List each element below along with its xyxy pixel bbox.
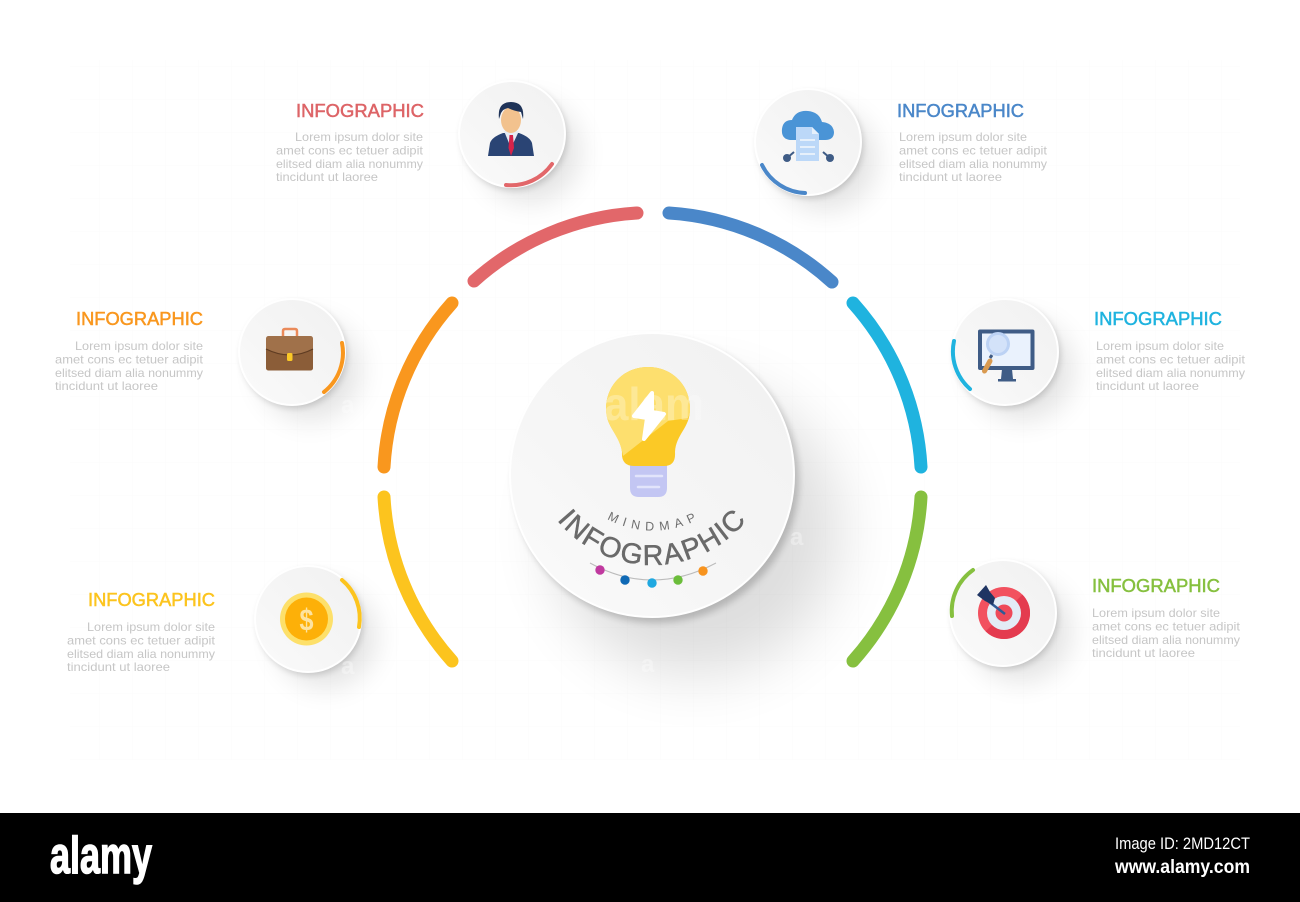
text: green label: INFOGRAPHIC xyxy=(1092,576,1220,596)
text: green label xyxy=(1092,576,1241,660)
text: yellow label: amet cons ec tetuer adipit xyxy=(67,634,216,648)
text: cyan label: INFOGRAPHIC xyxy=(1094,309,1222,329)
label: infographic curved text: INFOGRAPHIC xyxy=(558,508,744,566)
text: green label: amet cons ec tetuer adipit xyxy=(1092,620,1241,634)
text: red label xyxy=(276,101,424,184)
text: orange label: elitsed diam alia nonummy xyxy=(55,366,203,380)
text: cyan label: amet cons ec tetuer adipit xyxy=(1096,352,1246,366)
node: green target xyxy=(950,560,1071,681)
text: yellow label: Lorem ipsum dolor site xyxy=(87,620,215,634)
icon: light bulb: alam xyxy=(604,378,704,430)
text: red label: tincidunt ut laoree xyxy=(276,170,378,184)
text: red label: amet cons ec tetuer adipit xyxy=(276,144,424,158)
progress arc: red xyxy=(506,164,552,185)
icon: light bulb xyxy=(604,367,704,497)
watermark marks: a xyxy=(341,653,355,680)
arc: red xyxy=(474,213,637,281)
icon: businessman xyxy=(488,102,534,156)
ring: six coloured arc segments xyxy=(384,213,921,661)
node: cyan monitor xyxy=(952,299,1073,420)
progress arc: blue xyxy=(762,165,805,193)
text: red label: Lorem ipsum dolor site xyxy=(295,130,423,144)
text: blue label: Lorem ipsum dolor site xyxy=(899,130,1027,144)
node: red person xyxy=(459,81,580,202)
text: blue label: INFOGRAPHIC xyxy=(897,101,1024,121)
progress arc: green xyxy=(952,570,973,616)
node: yellow coin xyxy=(255,566,376,687)
footer: stock photo banner xyxy=(0,813,1300,902)
text: blue label: amet cons ec tetuer adipit xyxy=(899,144,1048,158)
text: cyan label: elitsed diam alia nonummy xyxy=(1096,366,1245,380)
watermark marks: a xyxy=(790,524,804,551)
text: red label: elitsed diam alia nonummy xyxy=(276,157,423,171)
text: orange label: tincidunt ut laoree xyxy=(55,379,158,393)
text: orange label: amet cons ec tetuer adipit xyxy=(55,352,204,366)
text: yellow label xyxy=(67,590,216,674)
text: cyan label: Lorem ipsum dolor site xyxy=(1096,339,1224,353)
text: blue label: tincidunt ut laoree xyxy=(899,170,1002,184)
text: cyan label xyxy=(1094,309,1246,393)
arc: green xyxy=(853,497,921,661)
text: blue label: elitsed diam alia nonummy xyxy=(899,157,1047,171)
text: green label: elitsed diam alia nonummy xyxy=(1092,633,1240,647)
text: yellow label: elitsed diam alia nonummy xyxy=(67,647,215,661)
watermark marks: a xyxy=(341,392,355,419)
text: orange label: Lorem ipsum dolor site xyxy=(75,339,203,353)
icon: monitor with magnifier xyxy=(978,330,1034,382)
icon: dollar coin: $ xyxy=(300,602,314,637)
decoration: coloured dot string xyxy=(590,563,716,588)
arc: orange xyxy=(384,303,452,467)
arc: blue xyxy=(669,213,832,282)
arc: yellow xyxy=(384,497,452,661)
text: yellow label: INFOGRAPHIC xyxy=(88,590,215,610)
arc: cyan xyxy=(853,303,921,467)
text: yellow label: tincidunt ut laoree xyxy=(67,660,170,674)
node: blue cloud xyxy=(755,89,876,210)
progress arc: orange xyxy=(324,343,343,392)
node: orange briefcase xyxy=(239,299,360,420)
footer url: www.alamy.com xyxy=(1114,857,1250,878)
progress arc: cyan xyxy=(953,341,970,389)
footer logo: alamy xyxy=(50,827,152,885)
label: mindmap curved text: MINDMAP xyxy=(608,512,694,530)
central hub xyxy=(511,334,856,691)
icon: target with dart xyxy=(977,585,1030,639)
text: green label: Lorem ipsum dolor site xyxy=(1092,606,1220,620)
footer image id: Image ID: 2MD12CT xyxy=(1115,834,1250,853)
text: blue label xyxy=(897,101,1048,184)
icon: cloud document xyxy=(782,111,834,162)
icon: briefcase xyxy=(266,329,313,370)
text: orange label xyxy=(55,309,204,393)
text: red label: INFOGRAPHIC xyxy=(296,101,424,121)
progress arc: yellow xyxy=(342,580,360,627)
watermark marks: a xyxy=(641,651,655,678)
text: green label: tincidunt ut laoree xyxy=(1092,646,1195,660)
text: cyan label: tincidunt ut laoree xyxy=(1096,379,1199,393)
text: orange label: INFOGRAPHIC xyxy=(76,309,203,329)
watermark marks xyxy=(341,392,804,680)
